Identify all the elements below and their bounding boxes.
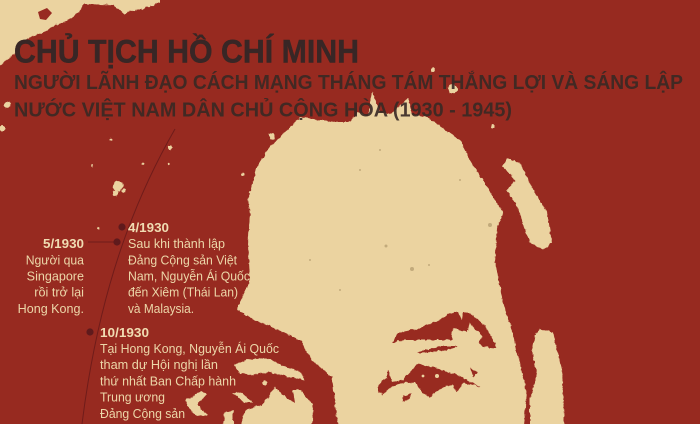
face: main area — [237, 92, 527, 424]
event: 4/1930: Đảng Cộng sản Việt — [128, 253, 238, 267]
timeline — [82, 129, 175, 424]
event: 5/1930: Người qua — [26, 253, 84, 267]
event: 10/1930: 10/1930 — [100, 326, 149, 340]
event: 4/1930: và Malaysia. — [128, 302, 194, 316]
paper stains — [309, 149, 492, 291]
event: 5/1930 — [18, 237, 84, 316]
heading: CHỦ TỊCH HỒ CHÍ MINH — [14, 34, 359, 70]
eyelid line — [417, 346, 458, 353]
timeline line — [82, 129, 175, 424]
event: 4/1930: Sau khi thành lập — [128, 237, 225, 251]
red blob on paper — [38, 8, 52, 20]
connector 5/1930 — [88, 241, 117, 243]
marker 4/1930 — [118, 223, 126, 231]
lower left highlight — [220, 410, 238, 424]
paper specks — [0, 68, 494, 385]
event: 10/1930: thứ nhất Ban Chấp hành — [100, 374, 236, 388]
title block — [14, 34, 683, 122]
ear: lower — [530, 329, 565, 424]
marker 5/1930 — [113, 238, 121, 246]
nose highlight — [185, 392, 208, 417]
nostril marks — [402, 393, 412, 401]
event: 10/1930: Trung ương — [100, 390, 165, 404]
cheek highlight — [237, 387, 313, 424]
eye corner — [470, 367, 478, 377]
paper patch: top left — [0, 0, 160, 70]
subtitle line 1: NGƯỜI LÃNH ĐẠO CÁCH MẠNG THÁNG TÁM THẮNG LỢI VÀ SÁNG LẬP — [14, 70, 683, 94]
eye — [378, 364, 480, 397]
event: 5/1930: Hong Kong. — [18, 302, 84, 316]
event: 10/1930: tham dự Hội nghị lần — [100, 358, 218, 372]
event: 4/1930: 4/1930 — [128, 221, 169, 235]
event: 5/1930: 5/1930 — [43, 237, 84, 251]
event: 5/1930: Singapore — [27, 269, 84, 283]
eyebrow — [392, 312, 497, 348]
marker 10/1930 — [86, 328, 94, 336]
ear: upper — [503, 158, 552, 250]
event: 4/1930: đến Xiêm (Thái Lan) — [128, 286, 238, 300]
event: 10/1930: Đảng Cộng sản — [100, 407, 185, 421]
event: 5/1930: rồi trở lại — [34, 286, 84, 300]
event: 10/1930 — [100, 326, 279, 421]
event: 10/1930: Tại Hong Kong, Nguyễn Ái Quốc — [100, 341, 279, 356]
small highlight — [232, 392, 253, 403]
subtitle line 2: NƯỚC VIỆT NAM DÂN CHỦ CỘNG HÒA (1930 - 1945) — [14, 98, 512, 122]
eye and brow — [378, 312, 497, 401]
eye glints — [422, 374, 439, 378]
brow highlight — [234, 358, 305, 380]
event: 4/1930 — [128, 221, 250, 316]
event: 4/1930: Nam, Nguyễn Ái Quốc — [128, 268, 250, 283]
